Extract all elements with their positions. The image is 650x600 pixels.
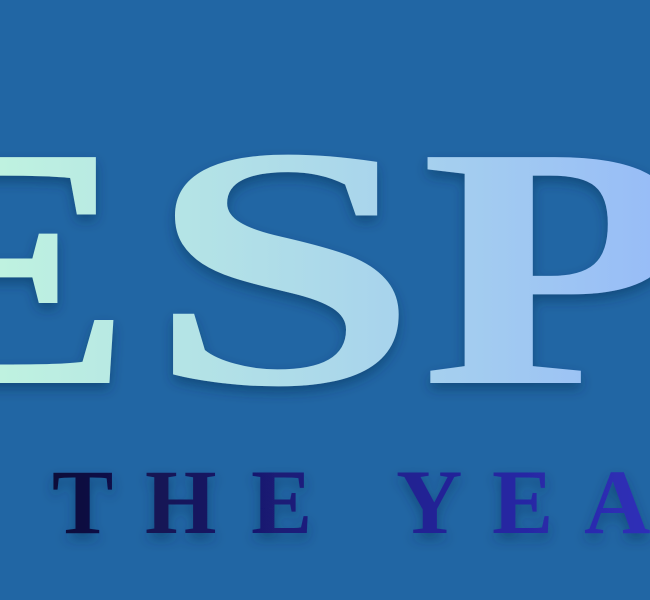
subtitle letters: T [52, 451, 113, 553]
subtitle letters: E [251, 451, 312, 553]
subtitle letters: E [492, 451, 553, 553]
subtitle letters [52, 451, 650, 553]
big title letters [0, 75, 650, 458]
subtitle letters: Y [396, 451, 462, 553]
subtitle letters: A [584, 451, 650, 553]
subtitle letters: H [145, 451, 217, 553]
big title letters: S [147, 75, 419, 458]
